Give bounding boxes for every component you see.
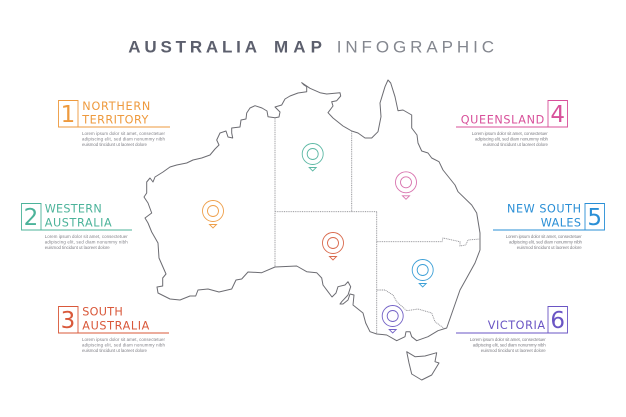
label 5: New South Wales: euismod tincidunt ut laoreet dolore — [517, 245, 582, 250]
label 2: Western Australia: euismod tincidunt ut laoreet dolore — [45, 245, 110, 250]
label 2: Western Australia: AUSTRALIA — [45, 217, 112, 230]
label 6: Victoria: euismod tincidunt ut laoreet dolore — [481, 348, 546, 353]
label 5: New South Wales: adipiscing elit, sed diam nonummy nibh — [509, 240, 583, 244]
label 6: Victoria: VICTORIA — [488, 319, 545, 332]
pin: Queensland — [396, 172, 416, 199]
label 6: Victoria: adipiscing elit, sed diam nonummy nibh — [473, 342, 546, 348]
label 6: Victoria — [456, 306, 568, 353]
label 1: Northern Territory: Lorem ipsum dolor sit amet, consectetuer — [82, 131, 166, 136]
label 4: Queensland: 4 — [550, 102, 565, 128]
label 3: South Australia: Lorem ipsum dolor sit amet, consectetuer — [82, 337, 166, 342]
label 3: South Australia: SOUTH — [82, 306, 123, 319]
label 4: Queensland: QUEENSLAND — [461, 114, 544, 127]
title — [128, 37, 494, 56]
map of Australia — [144, 80, 480, 380]
label 3: South Australia: euismod tincidunt ut laoreet dolore — [82, 348, 148, 353]
mainland coastline — [144, 80, 480, 341]
pin: New South Wales — [412, 260, 433, 287]
label 1: Northern Territory: TERRITORY — [81, 114, 148, 127]
label 4: Queensland: adipiscing elit, sed diam nonummy nibh — [475, 136, 549, 142]
state borders — [275, 118, 480, 334]
label 2: Western Australia: 2 — [24, 205, 38, 231]
label 6: Victoria: 6 — [550, 308, 565, 334]
label 5: New South Wales: 5 — [587, 205, 602, 231]
pin: Northern Territory — [302, 144, 323, 171]
label 4: Queensland: Lorem ipsum dolor sit amet, consectetuer — [472, 131, 548, 136]
label 2: Western Australia: WESTERN — [45, 203, 102, 216]
label 2: Western Australia: Lorem ipsum dolor sit amet, consectetuer — [45, 234, 128, 239]
label 6: Victoria: Lorem ipsum dolor sit amet, consectetuer — [470, 337, 546, 342]
label 1: Northern Territory: euismod tincidunt ut laoreet dolore — [82, 142, 148, 147]
title: INFOGRAPHIC — [337, 37, 494, 56]
label 3: South Australia: AUSTRALIA — [82, 320, 150, 333]
label 4: Queensland — [456, 100, 568, 147]
label 4: Queensland: euismod tincidunt ut laoreet dolore — [483, 142, 549, 147]
title: MAP — [274, 37, 322, 56]
label 2: Western Australia — [22, 203, 132, 250]
Tasmania — [407, 352, 439, 380]
label 5: New South Wales: NEW SOUTH — [507, 203, 581, 216]
label 5: New South Wales: Lorem ipsum dolor sit amet, consectetuer — [506, 234, 582, 239]
label 3: South Australia: 3 — [61, 308, 75, 334]
label 1: Northern Territory — [58, 100, 170, 147]
label 3: South Australia: adipiscing elit, sed diam nonummy nibh — [82, 342, 166, 348]
title: AUSTRALIA — [128, 37, 257, 56]
label 1: Northern Territory: adipiscing elit, sed diam nonummy nibh — [82, 136, 166, 142]
label 1: Northern Territory: 1 — [61, 102, 75, 128]
pin: Western Australia — [202, 200, 224, 228]
label 1: Northern Territory: NORTHERN — [82, 100, 150, 113]
label 2: Western Australia: adipiscing elit, sed diam nonummy nibh — [45, 240, 128, 244]
label 5: New South Wales: WALES — [541, 217, 581, 230]
pin: Victoria — [382, 306, 403, 333]
label 5: New South Wales — [493, 203, 604, 250]
label 3: South Australia — [58, 306, 169, 353]
pin: South Australia — [322, 232, 344, 260]
